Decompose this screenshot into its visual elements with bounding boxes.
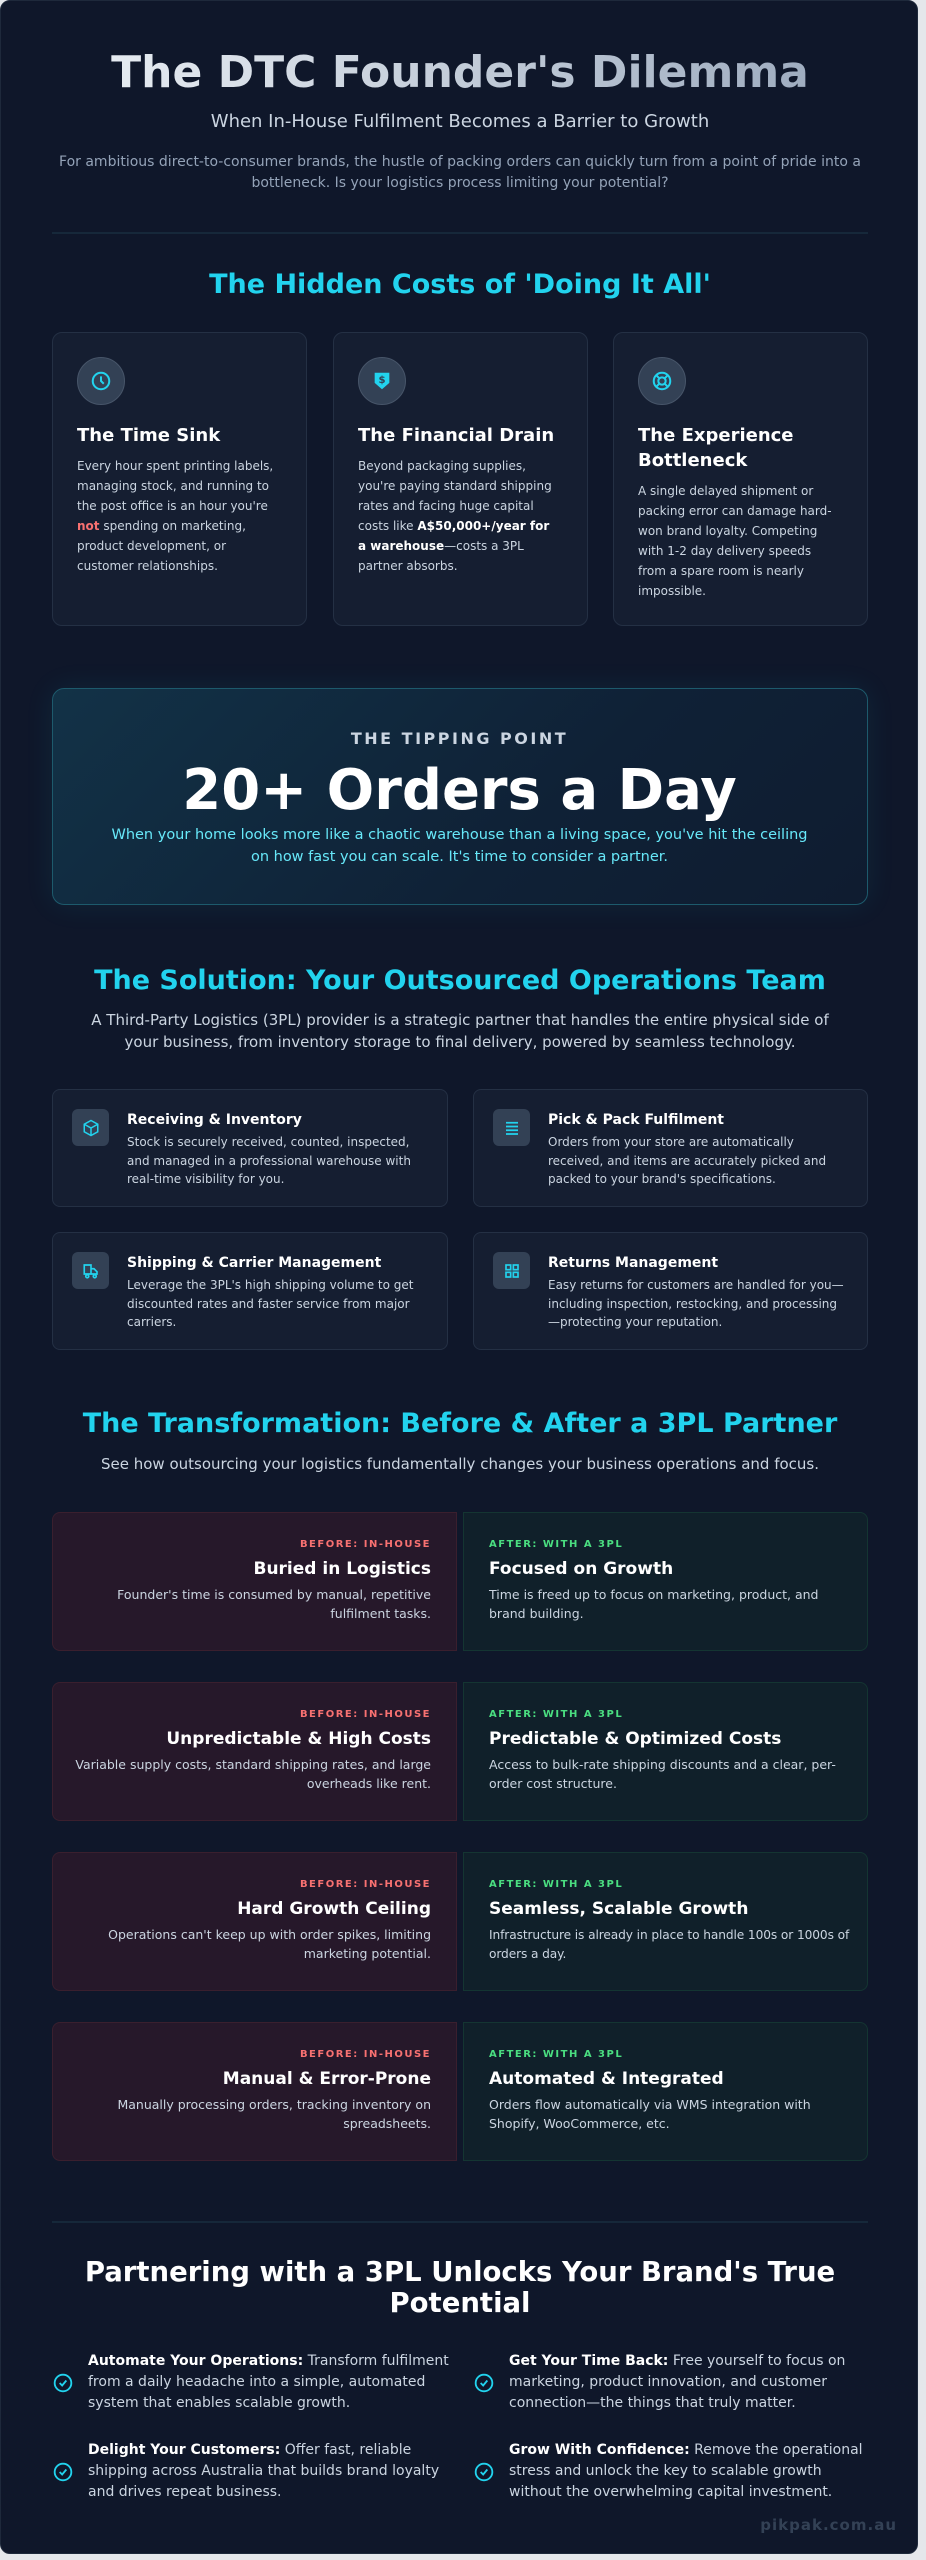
before 3: [52, 1852, 457, 1991]
after 3: Infrastructure is already in place to handle 100s or 1000s of orders a day.: [489, 1928, 849, 1960]
after 3: [463, 1852, 868, 1991]
service: pick pack: received, and items are accurately picked and packed to your brand's specifications.: [548, 1154, 826, 1186]
service: receiving: Stock is securely received, counted, inspected, and managed in a professional warehouse with real-time visibility for you.: [127, 1135, 411, 1186]
before 2: BEFORE: IN-HOUSE: [300, 1709, 431, 1720]
panel: financial drain: Beyond packaging supplies, you're paying standard shipping rates and facing huge capital costs like A$50,000+/year for a warehouse—costs a 3PL partner absorbs.: [358, 459, 552, 573]
service: returns: [473, 1232, 868, 1350]
heading: hidden costs: The Hidden Costs of 'Doing It All': [209, 269, 711, 300]
icon: truck: [72, 1252, 109, 1289]
callout: tipping point: on how fast you can scale. It's time to consider a partner.: [251, 848, 668, 864]
service: returns: —protecting your reputation.: [548, 1315, 722, 1329]
after 4: [463, 2022, 868, 2161]
icon: clock: [77, 357, 125, 405]
service: shipping: [52, 1232, 448, 1350]
benefit 1: Automate Your Operations: Transform fulfilment from a daily headache into a simple, automated system that enables scalable growth.: [88, 2353, 449, 2411]
after 3: Seamless, Scalable Growth: [489, 1899, 748, 1919]
before 2: Variable supply costs, standard shipping rates, and large overheads like rent.: [75, 1757, 431, 1790]
before 4: Manually processing orders, tracking inventory on spreadsheets.: [117, 2097, 431, 2130]
panel: time sink: Every hour spent printing labels, managing stock, and running to the post office is an hour you're not spending on marketing, product development, or customer relationships.: [77, 459, 273, 573]
heading: conclusion: Potential: [390, 2287, 530, 2319]
footer: brand: pikpak.com.au: [760, 2516, 897, 2534]
before 4: Manual & Error-Prone: [223, 2069, 431, 2089]
before 1: BEFORE: IN-HOUSE: [300, 1539, 431, 1550]
icon: list: [493, 1109, 530, 1146]
panel: time sink: The Time Sink: [77, 425, 220, 446]
heading: transformation: The Transformation: Before & After a 3PL Partner: [83, 1408, 837, 1439]
service: pick pack: [473, 1089, 868, 1207]
icon: check: [474, 2374, 494, 2392]
heading: solution: The Solution: Your Outsourced Operations Team: [94, 965, 826, 996]
icon: check: [54, 2374, 72, 2392]
icon: grid: [493, 1252, 530, 1289]
title: [1, 44, 919, 102]
after 2: [463, 1682, 868, 1821]
before 3: Hard Growth Ceiling: [237, 1899, 431, 1919]
after 1: Time is freed up to focus on marketing, product, and brand building.: [489, 1587, 818, 1620]
service: returns: including inspection, restocking, and processing: [548, 1296, 837, 1310]
service: pick pack: Orders from your store are automatically: [548, 1135, 794, 1149]
heading: conclusion: [85, 2256, 835, 2319]
icon: lifebuoy: [638, 357, 686, 405]
solution intro: A Third-Party Logistics (3PL) provider is a strategic partner that handles the entire physical side of your business, from inventory storage to final delivery, powered by seamless technology.: [91, 1011, 829, 1050]
before 3: Operations can't keep up with order spikes, limiting marketing potential.: [108, 1927, 431, 1960]
before 4: BEFORE: IN-HOUSE: [300, 2049, 431, 2060]
before 2: Unpredictable & High Costs: [166, 1729, 431, 1749]
title: The DTC Founder's Dilemma: [111, 47, 809, 98]
callout: tipping point: 20+ Orders a Day: [182, 758, 737, 823]
before 1: [52, 1512, 457, 1651]
after 1: [463, 1512, 868, 1651]
callout: tipping point: THE TIPPING POINT: [351, 729, 568, 748]
after 4: AFTER: WITH A 3PL: [489, 2049, 623, 2060]
panel: experience bottleneck: [613, 332, 868, 626]
transformation intro: See how outsourcing your logistics fundamentally changes your business operations and focus.: [101, 1455, 819, 1473]
after 1: Focused on Growth: [489, 1559, 673, 1579]
before 3: BEFORE: IN-HOUSE: [300, 1879, 431, 1890]
heading: conclusion: Partnering with a 3PL Unlocks Your Brand's True: [85, 2256, 835, 2288]
panel: time sink: [52, 332, 307, 626]
service: receiving: [52, 1089, 448, 1207]
service: returns: Easy returns for customers are handled for you—: [548, 1278, 844, 1292]
after 3: AFTER: WITH A 3PL: [489, 1879, 623, 1890]
after 2: AFTER: WITH A 3PL: [489, 1709, 623, 1720]
after 4: Orders flow automatically via WMS integration with Shopify, WooCommerce, etc.: [489, 2097, 811, 2130]
panel: experience bottleneck: The Experience Bottleneck: [638, 425, 794, 471]
benefit 3: Delight Your Customers: Offer fast, reliable shipping across Australia that builds brand loyalty and drives repeat business.: [88, 2442, 439, 2500]
panel: experience bottleneck: A single delayed shipment or packing error can damage hard-won brand loyalty. Competing with 1-2 day delivery speeds from a spare room is nearly impossible.: [638, 484, 832, 598]
benefit 2: Get Your Time Back: Free yourself to focus on marketing, product innovation, and customer connection—the things that truly matter.: [509, 2353, 845, 2411]
before 2: [52, 1682, 457, 1821]
before 1: Founder's time is consumed by manual, repetitive fulfilment tasks.: [117, 1587, 431, 1620]
icon: check: [474, 2462, 494, 2482]
before 4: [52, 2022, 457, 2161]
service: receiving: Receiving & Inventory: [127, 1112, 302, 1128]
service: returns: Returns Management: [548, 1255, 718, 1271]
after 2: Predictable & Optimized Costs: [489, 1729, 781, 1749]
icon: money shield: [358, 357, 406, 405]
intro text: For ambitious direct-to-consumer brands, the hustle of packing orders can quickly turn from a point of pride into a bottleneck. Is your logistics process limiting your potential?: [59, 154, 861, 191]
service: shipping: Shipping & Carrier Management: [127, 1255, 381, 1271]
before 1: Buried in Logistics: [253, 1559, 431, 1579]
benefit 4: Grow With Confidence: Remove the operational stress and unlock the key to scalable growth without the overwhelming capital investment.: [509, 2442, 863, 2500]
icon: check: [54, 2462, 72, 2482]
after 2: Access to bulk-rate shipping discounts and a clear, per-order cost structure.: [489, 1757, 836, 1790]
panel: financial drain: [333, 332, 588, 626]
service: pick pack: Pick & Pack Fulfilment: [548, 1112, 724, 1128]
callout: tipping point: When your home looks more like a chaotic warehouse than a living space, you've hit the ceiling: [111, 827, 808, 843]
subtitle: When In-House Fulfilment Becomes a Barrier to Growth: [211, 111, 709, 132]
icon: money shield: $: [378, 375, 386, 386]
after 4: Automated & Integrated: [489, 2069, 724, 2089]
after 1: AFTER: WITH A 3PL: [489, 1539, 623, 1550]
icon: box: [72, 1109, 109, 1146]
panel: financial drain: The Financial Drain: [358, 425, 554, 446]
callout: tipping point: [52, 688, 868, 905]
service: shipping: Leverage the 3PL's high shipping volume to get discounted rates and faster service from major carriers.: [127, 1278, 413, 1329]
